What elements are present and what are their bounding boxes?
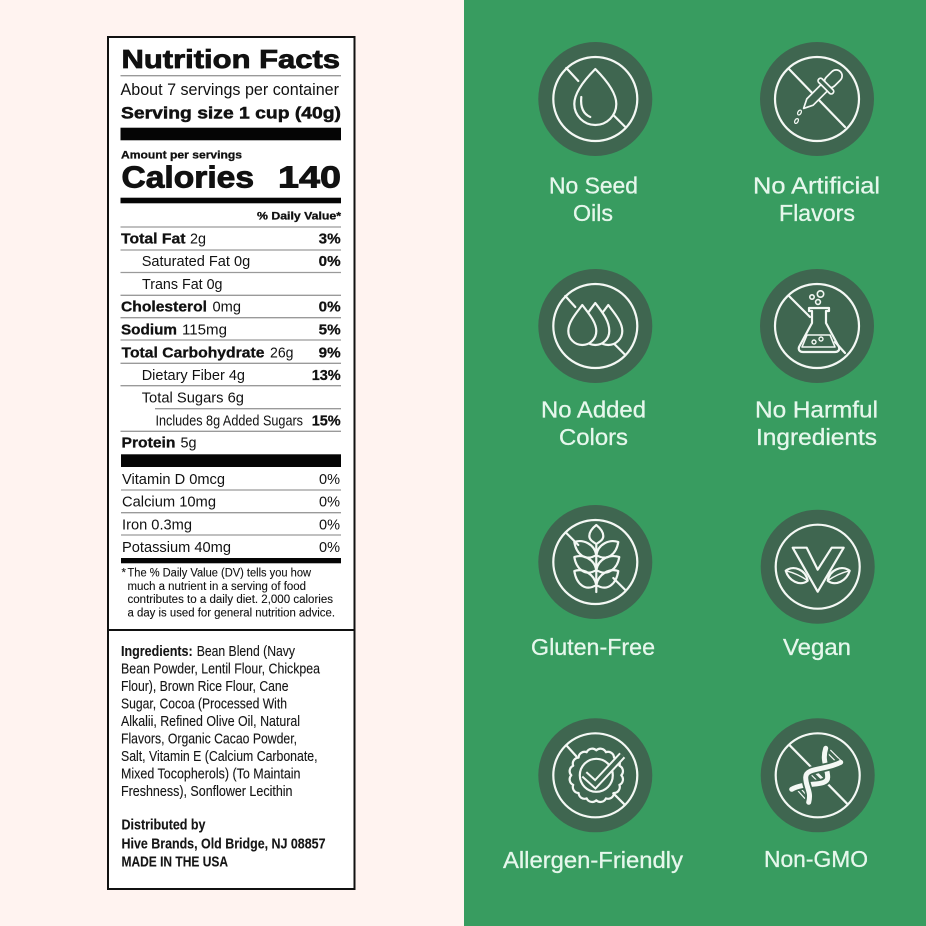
row: calcium: 0%	[319, 494, 340, 511]
label: no added colors	[541, 397, 646, 450]
icon: allergen friendly	[538, 718, 652, 832]
row: dietary fiber: Dietary Fiber 4g	[142, 367, 245, 384]
label: no artificial flavors: No Artificial	[753, 172, 880, 198]
text: serving size: Serving size 1 cup (40g)	[121, 103, 341, 122]
row: cholesterol: 0mg	[212, 299, 241, 316]
text block: ingredients: Bean Blend (Navy	[197, 643, 295, 660]
row: sodium: 5%	[319, 322, 341, 338]
row: sodium: 115mg	[182, 322, 227, 338]
row: iron	[122, 516, 340, 533]
row: calcium	[122, 494, 340, 511]
icon: no added colors	[538, 269, 652, 383]
label: no harmful ingredients: No Harmful	[755, 397, 878, 423]
row: added sugars: 15%	[312, 413, 341, 430]
icon: no artificial flavors	[760, 42, 874, 156]
number: calories value: 140	[278, 159, 341, 194]
thick bar: below calories	[120, 198, 341, 203]
label: no seed oils: Oils	[573, 200, 613, 226]
row: trans fat: Trans Fat 0g	[142, 276, 222, 293]
row: sodium: Sodium	[121, 322, 177, 338]
thick bar: top	[120, 128, 341, 140]
label: non-GMO: Non-GMO	[764, 846, 868, 872]
row: total sugars: Total Sugars 6g	[142, 390, 244, 407]
row: total carbohydrate: Total Carbohydrate	[122, 344, 264, 361]
row: added sugars: Includes 8g Added Sugars	[156, 413, 303, 430]
label: gluten free: Gluten-Free	[531, 634, 655, 660]
row: calcium: Calcium 10mg	[122, 494, 216, 511]
label: no artificial flavors	[753, 172, 880, 226]
label: no added colors: No Added	[541, 397, 646, 423]
panel: nutrition label	[108, 37, 354, 889]
row: iron: Iron 0.3mg	[122, 516, 192, 533]
text block: distributor: Distributed by	[122, 816, 206, 833]
row: saturated fat: Saturated Fat 0g	[142, 253, 250, 270]
label: vegan: Vegan	[783, 634, 851, 660]
label: no artificial flavors: Flavors	[779, 200, 855, 226]
text block: distributor: MADE IN THE USA	[122, 854, 228, 871]
row: potassium	[122, 539, 340, 556]
footnote: much a nutrient in a serving of food	[128, 581, 306, 593]
panel: left cream background	[0, 0, 464, 926]
label: allergen friendly: Allergen-Friendly	[503, 847, 684, 873]
row: saturated fat: 0%	[319, 253, 341, 270]
row: potassium: Potassium 40mg	[122, 539, 231, 556]
icon: no harmful ingredients	[760, 269, 874, 383]
text block: ingredients: Flavors, Organic Cacao Powder,	[121, 730, 297, 747]
label: no harmful ingredients: Ingredients	[756, 424, 877, 450]
row: cholesterol	[121, 299, 341, 316]
row: total carbohydrate	[122, 344, 341, 361]
footnote: a day is used for general nutrition advice.	[128, 607, 335, 619]
text block: ingredients	[121, 643, 321, 800]
row: dietary fiber	[142, 367, 341, 384]
row: vitamin D	[122, 471, 340, 488]
footnote: contributes to a daily diet. 2,000 calories	[128, 594, 333, 606]
text block: ingredients: Freshness), Sonflower Lecithin	[121, 783, 292, 800]
row: cholesterol: 0%	[319, 299, 341, 316]
icon: vegan	[761, 510, 875, 624]
row: protein	[122, 435, 196, 452]
heading: Nutrition Facts: Nutrition Facts	[122, 44, 340, 74]
row: potassium: 0%	[319, 539, 340, 556]
row: cholesterol: Cholesterol	[121, 299, 207, 316]
text block: ingredients: Bean Powder, Lentil Flour, Chickpea	[121, 661, 321, 678]
icon: gluten free	[538, 505, 652, 619]
row: sodium	[121, 322, 341, 338]
text block: distributor	[122, 816, 326, 871]
text: percent daily value: % Daily Value*	[257, 210, 342, 222]
text block: ingredients: Sugar, Cocoa (Processed With	[121, 696, 287, 713]
row: vitamin D: 0%	[319, 471, 340, 488]
text: servings per container: About 7 servings per container	[120, 80, 339, 99]
label: no seed oils: No Seed	[549, 172, 638, 198]
row: protein: 5g	[180, 435, 196, 452]
row: iron: 0%	[319, 516, 340, 533]
row: vitamin D: Vitamin D 0mcg	[122, 471, 225, 488]
row: total fat	[121, 230, 341, 247]
label: no harmful ingredients	[755, 397, 878, 450]
label: no seed oils	[549, 172, 638, 226]
text block: ingredients: Alkalii, Refined Olive Oil, Natural	[121, 713, 300, 730]
text: amount per servings: Amount per servings	[121, 150, 242, 162]
row: total carbohydrate: 26g	[270, 344, 294, 361]
row: total fat: Total Fat	[121, 230, 186, 247]
text block: ingredients: Mixed Tocopherols) (To Maintain	[121, 766, 300, 783]
thick bar: vitamins	[121, 454, 341, 467]
text block: ingredients: Flour), Brown Rice Flour, Cane	[121, 678, 288, 695]
text block: ingredients: Salt, Vitamin E (Calcium Carbonate,	[121, 748, 318, 765]
footnote	[122, 568, 335, 619]
panel: right green background	[464, 0, 926, 926]
label: no added colors: Colors	[559, 424, 628, 450]
row: total fat: 3%	[319, 230, 341, 247]
thick bar: bottom	[121, 558, 341, 563]
text block: ingredients: Ingredients:	[121, 643, 193, 660]
icon: no seed oils	[538, 42, 652, 156]
footnote: *	[122, 568, 126, 580]
text: calories heading: Calories	[122, 159, 254, 194]
row: saturated fat	[142, 253, 341, 270]
text block: distributor: Hive Brands, Old Bridge, NJ 08857	[122, 835, 326, 852]
row: dietary fiber: 13%	[312, 367, 341, 384]
footnote: The % Daily Value (DV) tells you how	[128, 568, 312, 580]
row: total fat: 2g	[190, 230, 206, 247]
row: protein: Protein	[122, 435, 176, 452]
icon: non-GMO	[761, 718, 875, 832]
row: total carbohydrate: 9%	[319, 344, 341, 361]
